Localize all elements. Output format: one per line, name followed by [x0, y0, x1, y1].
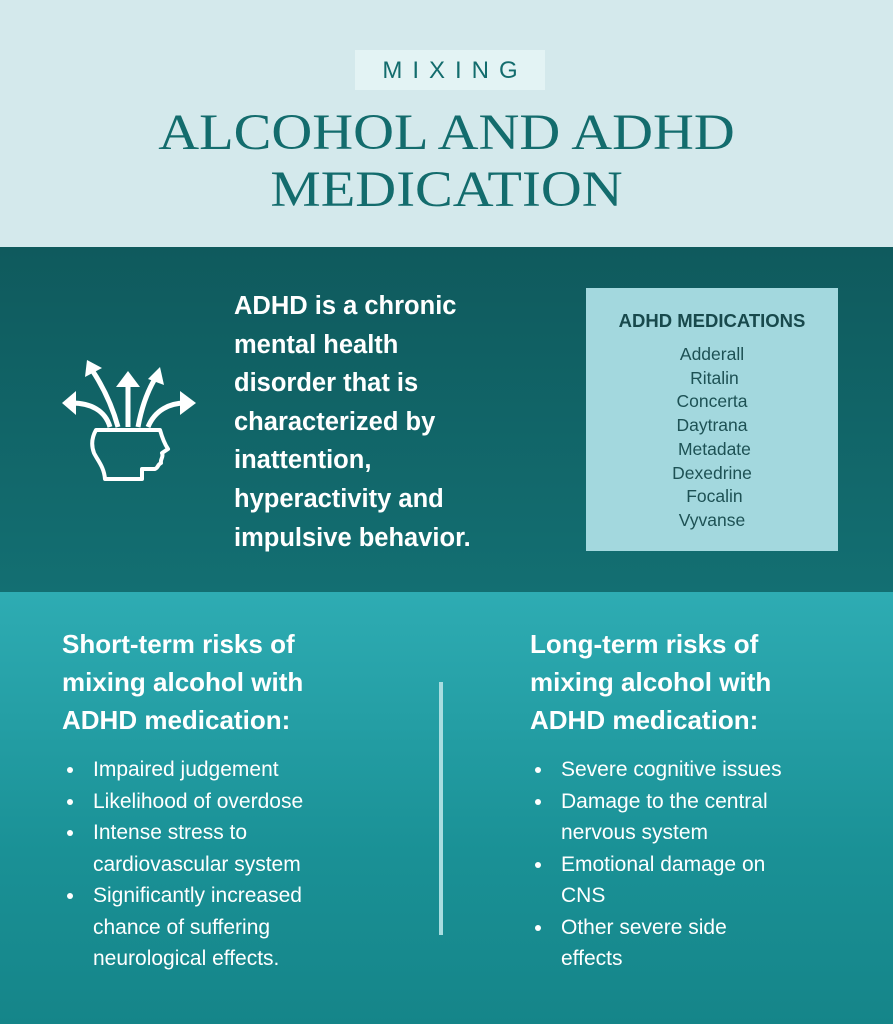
- definition text: ADHD is a chronic mental health disorder that is characterized by inattention, hyperactivity and impulsive behavior.: [234, 292, 471, 552]
- medications list: Focalin: [686, 486, 743, 506]
- long-term list: Damage to the central nervous system: [561, 790, 768, 844]
- short-term list: Impaired judgement: [93, 758, 279, 781]
- short-term list: [67, 758, 303, 970]
- short-term list: Intense stress to cardiovascular system: [93, 821, 301, 876]
- medications list: Vyvanse: [679, 510, 745, 530]
- short-term list: Likelihood of overdose: [93, 790, 303, 812]
- risks section background: [0, 592, 893, 1024]
- medications list: Concerta: [676, 391, 748, 411]
- header background: [0, 0, 893, 247]
- long-term list: Other severe side effects: [561, 916, 727, 970]
- long-term list: Severe cognitive issues: [561, 758, 782, 781]
- long-term heading: Long-term risks of mixing alcohol with ADHD medication:: [530, 629, 771, 735]
- medications list: Ritalin: [690, 368, 739, 388]
- medications list: Metadate: [678, 439, 751, 459]
- medications list: Dexedrine: [672, 463, 752, 483]
- panel: long-term risks: [530, 629, 782, 970]
- divider: [439, 682, 443, 935]
- mixing label: [355, 50, 545, 90]
- mixing label: MIXING: [382, 57, 528, 84]
- short-term list: Significantly increased chance of suffering neurological effects.: [93, 884, 302, 970]
- long-term list: [535, 758, 782, 970]
- panel: ADHD medications: [586, 288, 838, 551]
- long-term list: Emotional damage on CNS: [561, 852, 765, 907]
- medications list: Daytrana: [676, 415, 748, 435]
- title: ALCOHOL AND ADHD: [158, 105, 735, 161]
- title: [158, 105, 735, 218]
- short-term heading: Short-term risks of mixing alcohol with ADHD medication:: [62, 629, 303, 735]
- panel: short-term risks: [62, 629, 303, 970]
- definition section background: [0, 247, 893, 592]
- medications heading: ADHD MEDICATIONS: [619, 310, 805, 331]
- medications list: [672, 344, 752, 530]
- title: MEDICATION: [270, 162, 623, 218]
- icon: head with arrows: [62, 360, 196, 481]
- medications list: Adderall: [680, 344, 744, 364]
